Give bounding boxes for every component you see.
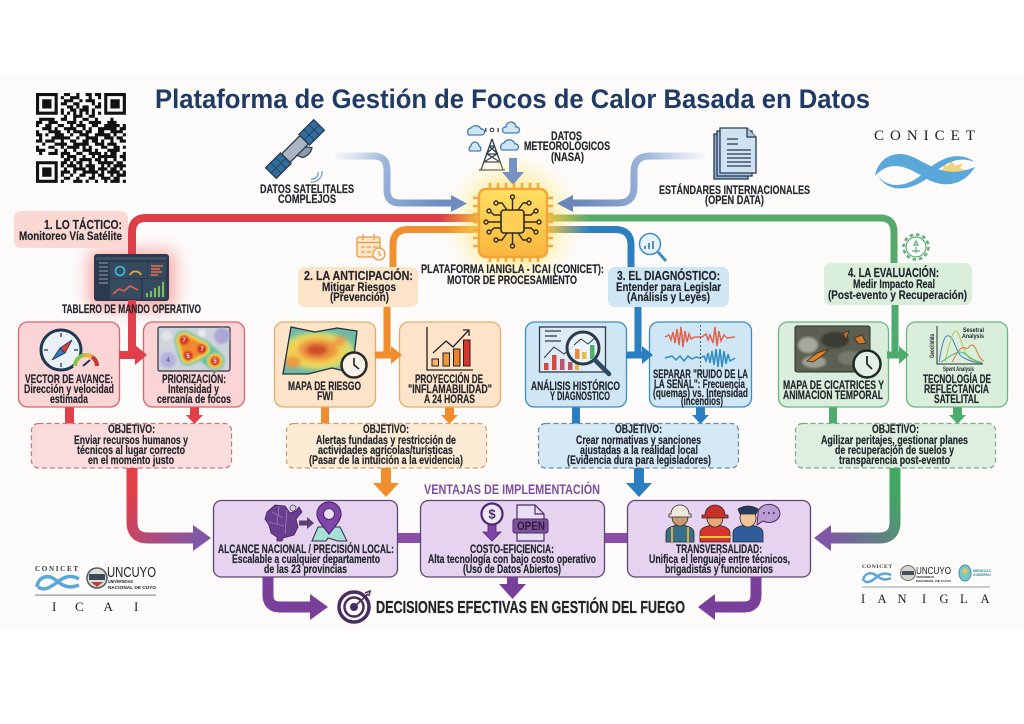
text: separar: LA SEÑAL": Frecuencia	[654, 378, 745, 391]
logo: IANIGLA block: MENDOZA	[973, 569, 991, 573]
text: priorización: PRIORIZACIÓN:	[162, 373, 226, 386]
objective: orange: Alertas fundadas y restricción de	[316, 435, 456, 447]
icon: risk map	[282, 327, 366, 378]
objective: green: Agilizar peritajes, gestionar planes	[821, 435, 968, 447]
heading: 2 la anticipación	[298, 267, 418, 307]
arrow: blue to objective right	[692, 407, 709, 424]
connector: route 3 blue	[546, 230, 631, 270]
icon: circuit traces	[484, 195, 541, 248]
icon: heat map: 7	[182, 338, 186, 344]
objective: red: Enviar recursos humanos y	[74, 435, 188, 447]
icon: dollar down	[482, 504, 502, 541]
text: alcance	[218, 543, 394, 576]
icon: provinces map	[265, 505, 302, 541]
icon: firefighter	[700, 505, 730, 542]
source: weather data	[468, 122, 610, 170]
panel: platform engine chip	[421, 183, 604, 287]
label: dashboard: TABLERO DE MANDO OPERATIVO	[62, 304, 201, 316]
logo: IANIGLA block: CONICET	[862, 564, 892, 570]
logo: IANIGLA block: NACIONAL DE CUYO	[916, 579, 952, 583]
card: proyección	[400, 322, 500, 407]
arrow: green to benefits	[814, 468, 895, 551]
card: análisis histórico	[526, 322, 626, 407]
objective: green: de recuperación de suelos y	[835, 445, 954, 457]
text: reflectancia: TECNOLOGÍA DE	[923, 373, 991, 386]
icon: QR code	[36, 93, 126, 183]
text: vector: estimada	[50, 394, 88, 406]
text: transversalidad: Unifica el lenguaje entre técnicos,	[649, 554, 790, 566]
arrow: satellite to engine	[335, 156, 467, 212]
heading: 1 lo táctico: 1. LO TÁCTICO:	[44, 217, 122, 232]
card: separar ruido	[650, 322, 752, 408]
heading: 4 la evaluación: (Post-evento y Recuperación)	[828, 290, 967, 302]
icon: magnifier chart	[640, 234, 666, 261]
arrow: weather to engine	[502, 158, 524, 185]
text: vector: Dirección y velocidad	[24, 384, 114, 396]
icon: heat map: 5	[186, 354, 190, 360]
objective: orange: actividades agrícolas/turísticas	[318, 445, 453, 457]
icon: officer	[733, 506, 763, 542]
text: separar: (incendios)	[681, 396, 723, 408]
icon: open document	[513, 505, 548, 541]
text: cicatrices	[783, 380, 884, 402]
glow: engine halo	[443, 152, 583, 292]
chart: spectral curves	[930, 326, 985, 373]
icon: gear with sprout	[904, 234, 928, 260]
icon: rising bars	[427, 327, 473, 370]
heading: 1 lo táctico: Monitoreo Vía Satélite	[19, 231, 122, 243]
arrow: green to objective right	[949, 407, 966, 424]
objective: red: técnicos al lugar correcto	[77, 445, 185, 457]
logo: IANIGLA block	[861, 564, 991, 606]
text: análisis: ANÁLISIS HISTÓRICO	[531, 380, 620, 393]
connector: green to objective left	[829, 407, 837, 424]
icon: target	[339, 591, 370, 622]
text: reflectancia	[923, 373, 991, 406]
icon: calendar clock	[357, 234, 385, 260]
chart: signal waves	[665, 325, 735, 374]
logo: ICAI block: UNCUYO	[107, 564, 156, 581]
logo: IANIGLA block: UNIVERSIDAD	[916, 575, 935, 579]
heading: title: Plataforma de Gestión de Focos de Calor Basada en Datos	[155, 84, 870, 114]
heading: 4 la evaluación: 4. LA EVALUACIÓN:	[848, 265, 939, 280]
arrow: left to decisions	[268, 577, 328, 620]
connector: blue to objective left	[572, 407, 580, 424]
text: reflectancia: REFLECTANCIA	[924, 384, 989, 396]
heading: 2 la anticipación: (Prevención)	[330, 292, 389, 304]
icon: open document: OPEN	[517, 519, 545, 533]
connector: green trunk	[887, 305, 909, 364]
text: vector: VECTOR DE AVANCE:	[25, 374, 113, 386]
label: weather: DATOS	[551, 131, 582, 143]
connector: route 1 red	[132, 218, 482, 258]
icon: pin on map	[312, 502, 347, 541]
heading: 3 el diagnóstico: (Análisis y Leyes)	[627, 292, 710, 304]
chart: spectral curves: Spent Analysis	[943, 367, 974, 373]
text: mapa: FWI	[317, 391, 333, 403]
label: standards: (OPEN DATA)	[705, 195, 764, 207]
text: vector	[24, 374, 114, 406]
objective: blue: (Evidencia dura para legisladores)	[567, 455, 711, 467]
text: costo: COSTO-EFICIENCIA:	[470, 544, 554, 556]
label: weather: (NASA)	[551, 152, 584, 164]
icon: speech bubble	[757, 504, 780, 525]
icon: burn scar satellite image	[795, 326, 880, 378]
text: priorización	[157, 373, 231, 406]
text: costo: Alta tecnología con bajo costo operativo	[428, 554, 596, 566]
panel: column 1 tactical	[14, 211, 244, 468]
objective: green: transparencia post-evento	[839, 455, 950, 467]
arrow: red to benefits	[132, 468, 211, 551]
heading: 2 la anticipación: Mitigar Riesgos	[322, 282, 396, 294]
icon: heat map: 5	[213, 359, 217, 365]
text: proyección	[408, 373, 492, 406]
objective: blue	[538, 424, 738, 468]
arrow: orange to objective right	[441, 407, 458, 424]
panel: column 2 anticipation	[274, 234, 500, 468]
label: satellite: DATOS SATELITALES	[260, 184, 354, 196]
source: open data standards	[659, 128, 810, 207]
text: mapa	[288, 381, 361, 403]
icon: documents	[714, 128, 756, 179]
logo: ICAI block: NACIONAL DE CUYO	[108, 585, 157, 590]
arrow: orange to benefits	[373, 468, 399, 497]
objective: red	[32, 424, 232, 468]
icon: chart under magnifier	[540, 327, 609, 374]
logo: ICAI block: CONICET	[35, 565, 78, 573]
objective: green: OBJETIVO:	[872, 424, 919, 436]
text: separar: SEPARAR "RUIDO DE LA	[653, 369, 748, 381]
label: platform engine: MOTOR DE PROCESAMIENTO	[447, 275, 577, 287]
panel: column 3 diagnosis	[526, 234, 752, 468]
icon: heat map: 4	[166, 358, 170, 364]
objective: blue: Crear normativas y sanciones	[576, 435, 701, 447]
logo: ICAI block: ICAI	[52, 599, 138, 614]
label: platform engine	[421, 264, 604, 287]
connector: route 4 green	[546, 218, 894, 266]
chart: spectral curves: Sesetral	[963, 328, 984, 334]
connector: route 2 orange	[393, 230, 482, 270]
heading: 1 lo táctico	[14, 211, 128, 248]
logo: IANIGLA block: IANIGLA	[861, 592, 990, 606]
logo: CONICET top right	[874, 128, 975, 188]
arrow: red to objective right	[186, 407, 203, 424]
chart: spectral curves: Analysis	[962, 334, 985, 340]
chart: spectral curves: Geocilidida	[930, 334, 936, 358]
text: proyección: A 24 HORAS	[424, 394, 475, 406]
heading: ventajas: VENTAJAS DE IMPLEMENTACIÓN	[424, 482, 600, 497]
card: reflectancia	[906, 322, 1008, 407]
text: cicatrices: MAPA DE CICATRICES Y	[783, 380, 884, 392]
icon: dollar down: $	[488, 506, 496, 522]
label: satellite	[260, 184, 354, 206]
text: costo: (Uso de Datos Abiertos)	[463, 564, 561, 576]
connector: orange trunk	[375, 307, 402, 364]
text: separar: (quemas) vs. Intensidad	[653, 388, 748, 400]
arrow: blue to benefits	[626, 468, 652, 497]
text: análisis	[531, 380, 620, 403]
card: mapa de cicatrices	[778, 322, 888, 407]
objective: red: en el momento justo	[88, 455, 174, 467]
text: separar	[653, 369, 748, 408]
icon: heat map: 7	[200, 347, 204, 353]
heading: 4 la evaluación	[824, 263, 972, 305]
heading: 4 la evaluación: Medir Impacto Real	[853, 279, 935, 291]
text: proyección: "INFLAMABILIDAD"	[408, 384, 492, 396]
arrow: right to decisions	[698, 577, 756, 620]
text: proyección: PROYECCIÓN DE	[415, 373, 483, 386]
objective: blue: ajustadas a la realidad local	[580, 445, 698, 457]
label: platform engine: PLATAFORMA IANIGLA - ICAI (CONICET):	[421, 264, 604, 276]
objective: orange: (Pasar de la intuición a la evidencia)	[309, 455, 463, 467]
logo: IANIGLA block: GOBIERNO	[973, 573, 991, 577]
connector: blue trunk	[626, 307, 653, 364]
logo: ICAI block	[35, 564, 157, 614]
text: transversalidad	[649, 544, 790, 576]
glow: dashboard halo	[88, 250, 176, 310]
connector: purple links	[396, 533, 628, 543]
icon: technician	[666, 505, 694, 542]
logo: CONICET top right: CONICET	[874, 128, 975, 144]
text: priorización: cercanía de focos	[157, 394, 231, 406]
panel: transversalidad	[628, 500, 810, 577]
text: priorización: Intensidad y	[168, 384, 219, 396]
objective: blue: OBJETIVO:	[615, 424, 662, 436]
text: análisis: Y DIAGNOSTICO	[550, 391, 610, 403]
objective: green	[796, 424, 996, 468]
icon: signal waves	[311, 171, 322, 182]
text: transversalidad: brigadistas y funcionarios	[665, 564, 773, 576]
logo: ICAI block: UNIVERSIDAD	[108, 579, 134, 584]
connector: red to objective left	[65, 407, 74, 424]
icon: heat map	[158, 327, 230, 371]
card: priorización	[144, 322, 244, 407]
icon: satellite	[266, 120, 328, 182]
panel: alcance nacional	[214, 500, 398, 577]
arrow: centre to decisions	[499, 577, 526, 599]
label: standards: ESTÁNDARES INTERNACIONALES	[659, 184, 810, 197]
card: vector de avance	[18, 322, 120, 407]
objective: orange	[286, 424, 486, 468]
panel: column 4 evaluation	[778, 234, 1008, 468]
icon: dashboard	[94, 254, 169, 301]
heading: 2 la anticipación: 2. LA ANTICIPACIÓN:	[304, 268, 413, 283]
label: satellite: COMPLEJOS	[278, 194, 336, 206]
label: weather: METEOROLÓGICOS	[524, 140, 610, 153]
heading: decisions outcome: DECISIONES EFECTIVAS EN GESTIÓN DEL FUEGO	[376, 596, 685, 617]
panel: costo eficiencia	[420, 500, 604, 577]
connector: orange to objective left	[321, 407, 329, 424]
text: cicatrices: ANIMACION TEMPORAL	[783, 390, 883, 402]
source: satellite data	[260, 120, 354, 206]
logo: IANIGLA block: UNCUYO	[916, 566, 951, 577]
text: alcance: ALCANCE NACIONAL / PRECISIÓN LOCAL:	[218, 543, 394, 556]
label: weather	[524, 131, 610, 164]
card: mapa de riesgo	[274, 322, 376, 407]
objective: orange: OBJETIVO:	[363, 424, 409, 436]
objective: red: OBJETIVO:	[108, 424, 155, 436]
text: mapa: MAPA DE RIESGO	[288, 381, 361, 393]
label: standards	[659, 184, 810, 207]
text: alcance: Escalable a cualquier departamento	[232, 554, 380, 566]
icon: compass and gauge	[41, 330, 99, 370]
heading: 3 el diagnóstico	[608, 267, 729, 307]
arrow: province to local	[299, 517, 314, 529]
text: costo	[428, 544, 596, 576]
heading: 3 el diagnóstico: Entender para Legislar	[616, 282, 721, 294]
heading: 3 el diagnóstico: 3. EL DIAGNÓSTICO:	[617, 268, 720, 283]
text: transversalidad: TRANSVERSALIDAD:	[676, 544, 762, 556]
icon: weather tower	[468, 122, 520, 170]
connector: red trunk	[119, 300, 147, 365]
arrow: standards to engine	[557, 156, 705, 212]
text: alcance: de las 23 provincias	[264, 564, 347, 576]
text: reflectancia: SATELITAL	[934, 394, 979, 406]
